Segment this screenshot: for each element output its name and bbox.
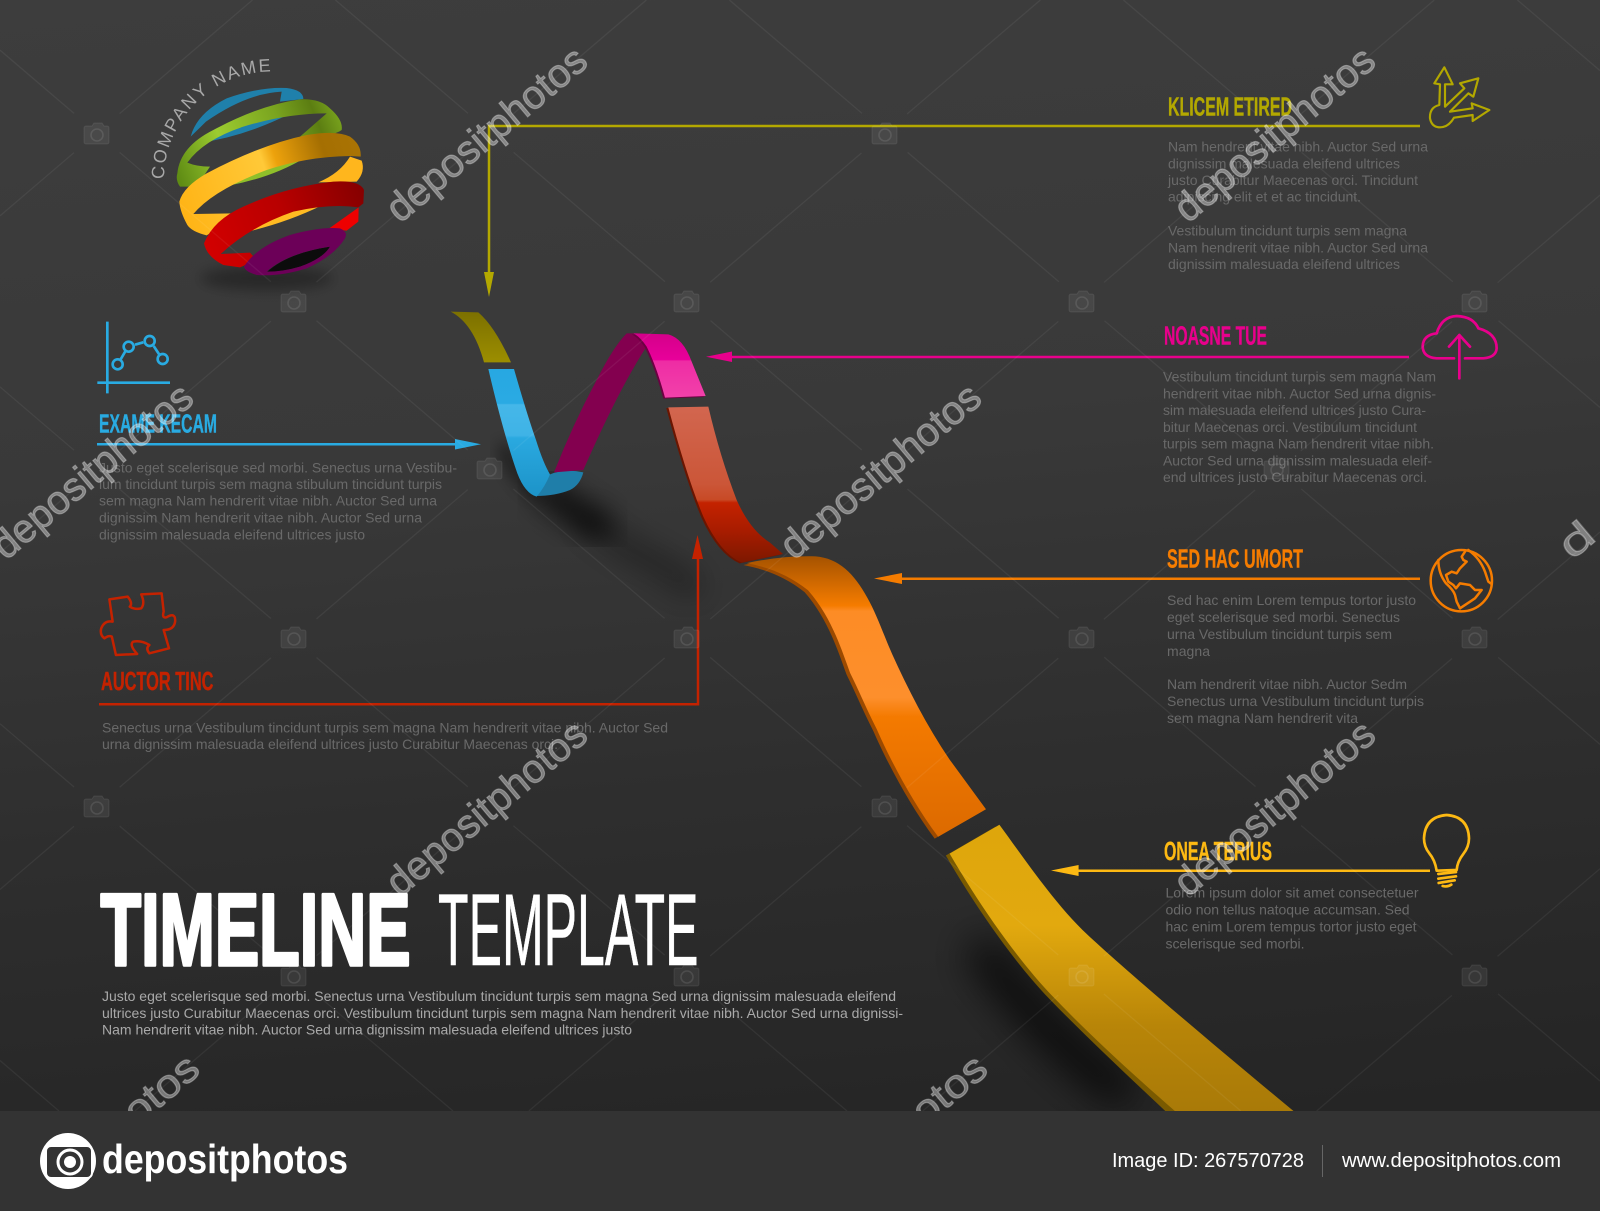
segment: blue xyxy=(488,369,583,497)
body text: Auctor Sed urna dignissim malesuada eleif- xyxy=(1163,452,1432,468)
icon: line chart xyxy=(97,322,170,393)
body text xyxy=(99,459,457,542)
body text: lum tincidunt turpis sem magna stibulum tincidunt turpis xyxy=(99,476,442,492)
title: TIMELINE xyxy=(100,873,410,987)
body text: sem magna Nam hendrerit vita xyxy=(1167,710,1358,726)
red band xyxy=(204,181,364,267)
sphere shadow xyxy=(200,266,333,290)
body text: hendrerit vitae nibh. Auctor Sed urna dignis- xyxy=(1163,386,1436,402)
icon: three-way arrows xyxy=(1430,67,1489,127)
body text: Senectus urna Vestibulum tincidunt turpis xyxy=(1167,693,1424,709)
body text: urna Vestibulum tincidunt turpis sem xyxy=(1167,626,1392,642)
body text: magna xyxy=(1167,643,1210,659)
body text: Justo eget scelerisque sed morbi. Senectus urna Vestibu- xyxy=(99,459,457,475)
intro text block: Nam hendrerit vitae nibh. Auctor Sed urna dignissim malesuada eleifend ultrices justo xyxy=(102,1022,632,1038)
body text: urna dignissim malesuada eleifend ultrices justo Curabitur Maecenas orci. xyxy=(102,736,558,752)
text: TEMPLATE xyxy=(438,873,698,987)
body text: adipiscing elit et et ac tincidunt. xyxy=(1168,189,1361,205)
segment: pink xyxy=(632,333,706,399)
heading: SED HAC UMORT xyxy=(1167,543,1303,573)
footer logo: depositphotos xyxy=(102,1136,348,1182)
body text: scelerisque sed morbi. xyxy=(1166,935,1304,951)
timeline ribbon: upper section xyxy=(451,312,783,563)
body text: dignissim malesuada eleifend ultrices xyxy=(1168,155,1400,171)
body text: Nam hendrerit vitae nibh. Auctor Sed urna xyxy=(1168,239,1428,255)
body text: dignissim Nam hendrerit vitae nibh. Auctor Sed urna xyxy=(99,510,422,526)
heading: EXAME KECAM xyxy=(99,408,217,438)
logo sphere xyxy=(152,59,364,291)
heading: ONEA TERIUS xyxy=(1164,836,1272,866)
icon: cloud upload xyxy=(1423,316,1497,378)
body text: eget scelerisque sed morbi. Senectus xyxy=(1167,609,1400,625)
connector with arrow xyxy=(874,573,1420,584)
watermark text: hotos xyxy=(96,1045,208,1150)
intro text block: ultrices justo Curabitur Maecenas orci. Vestibulum tincidunt turpis sem magna Nam hendrerit vitae nibh. Auctor Sed urna dignissi- xyxy=(102,1005,903,1021)
segment: coral red xyxy=(666,407,783,563)
shadows under the ribbon xyxy=(505,450,1120,1090)
segment: orange xyxy=(743,556,986,839)
body text: sem magna Nam hendrerit vitae nibh. Auctor Sed urna xyxy=(99,493,437,509)
body text: bitur Maecenas orci. Vestibulum tincidunt xyxy=(1163,419,1417,435)
body text xyxy=(1167,139,1428,272)
icon: light bulb xyxy=(1424,815,1469,886)
logo sphere: COMPANY NAME xyxy=(152,59,270,178)
body text: dignissim malesuada eleifend ultrices justo xyxy=(99,526,365,542)
body text: hac enim Lorem tempus tortor justo eget xyxy=(1166,919,1417,935)
purple band xyxy=(244,228,346,275)
segment: yellow xyxy=(946,825,1294,1113)
watermark text: depositphotos xyxy=(378,38,596,231)
body text xyxy=(102,719,668,752)
watermark text: depositphotos xyxy=(772,375,990,568)
image id: Image ID: 267570728 xyxy=(1112,1150,1304,1172)
connector with arrow xyxy=(97,439,481,450)
connector with arrow xyxy=(99,535,703,704)
heading: KLICEM ETIRED xyxy=(1168,92,1292,122)
body text: Sed hac enim Lorem tempus tortor justo xyxy=(1167,592,1416,608)
yellow band xyxy=(179,133,363,235)
body text xyxy=(1163,369,1436,485)
connector with arrow xyxy=(484,126,1420,297)
connector with arrow xyxy=(1051,865,1430,876)
body text: Lorem ipsum dolor sit amet consectetuer xyxy=(1166,885,1419,901)
connector with arrow xyxy=(706,352,1409,362)
segment: purple xyxy=(554,333,647,472)
body text: justo Curabitur Maecenas orci. Tincidunt xyxy=(1167,172,1418,188)
watermark text: d xyxy=(1550,512,1600,568)
footer bar xyxy=(0,1111,1600,1211)
body text: Nam hendrerit vitae nibh. Auctor Sed urna xyxy=(1168,139,1428,155)
body text xyxy=(1167,592,1424,726)
body text: turpis sem magna Nam hendrerit vitae nibh. xyxy=(1163,436,1434,452)
item: Onea Terius xyxy=(1051,815,1469,951)
blue band xyxy=(191,88,303,143)
watermark text: depositphotos xyxy=(1166,712,1384,905)
item: Auctor Tinc xyxy=(99,535,703,752)
item: Sed Hac Umort xyxy=(874,543,1492,726)
body text: Vestibulum tincidunt turpis sem magna Nam xyxy=(1163,369,1436,385)
body text: Vestibulum tincidunt turpis sem magna xyxy=(1168,223,1407,239)
heading: AUCTOR TINC xyxy=(101,666,214,696)
watermark text: depositphotos xyxy=(378,712,596,905)
green band xyxy=(177,99,342,187)
body text: sim malesuada eleifend ultrices justo Cura- xyxy=(1163,402,1426,418)
icon: globe xyxy=(1431,550,1492,611)
segment: olive xyxy=(451,312,511,362)
company name xyxy=(164,71,307,179)
watermark text: hotos xyxy=(884,1045,996,1150)
item: Klicem Etired xyxy=(484,67,1489,297)
timeline ribbon: lower section xyxy=(743,556,1294,1113)
footer logo xyxy=(40,1133,348,1189)
item: Exame Kecam xyxy=(97,322,481,542)
intro text block xyxy=(102,988,903,1038)
body text: Senectus urna Vestibulum tincidunt turpis sem magna Nam hendrerit vitae nibh. Auctor Sed xyxy=(102,719,668,735)
body text: odio non tellus natoque accumsan. Sed xyxy=(1166,902,1410,918)
body text xyxy=(1166,885,1419,951)
body text: end ultrices justo Curabitur Maecenas orci. xyxy=(1163,469,1427,485)
watermark text: depositphotos xyxy=(1166,38,1384,231)
heading: NOASNE TUE xyxy=(1164,320,1267,350)
body text: dignissim malesuada eleifend ultrices xyxy=(1168,256,1400,272)
intro text block: Justo eget scelerisque sed morbi. Senectus urna Vestibulum tincidunt turpis sem magna Sed urna dignissim malesuada eleifend xyxy=(102,988,896,1004)
icon: puzzle piece xyxy=(101,593,175,655)
body text: Nam hendrerit vitae nibh. Auctor Sedm xyxy=(1167,676,1407,692)
watermark camera icons xyxy=(84,123,1487,986)
item: Noasne Tue xyxy=(706,316,1497,485)
website: www.depositphotos.com xyxy=(1341,1150,1561,1172)
